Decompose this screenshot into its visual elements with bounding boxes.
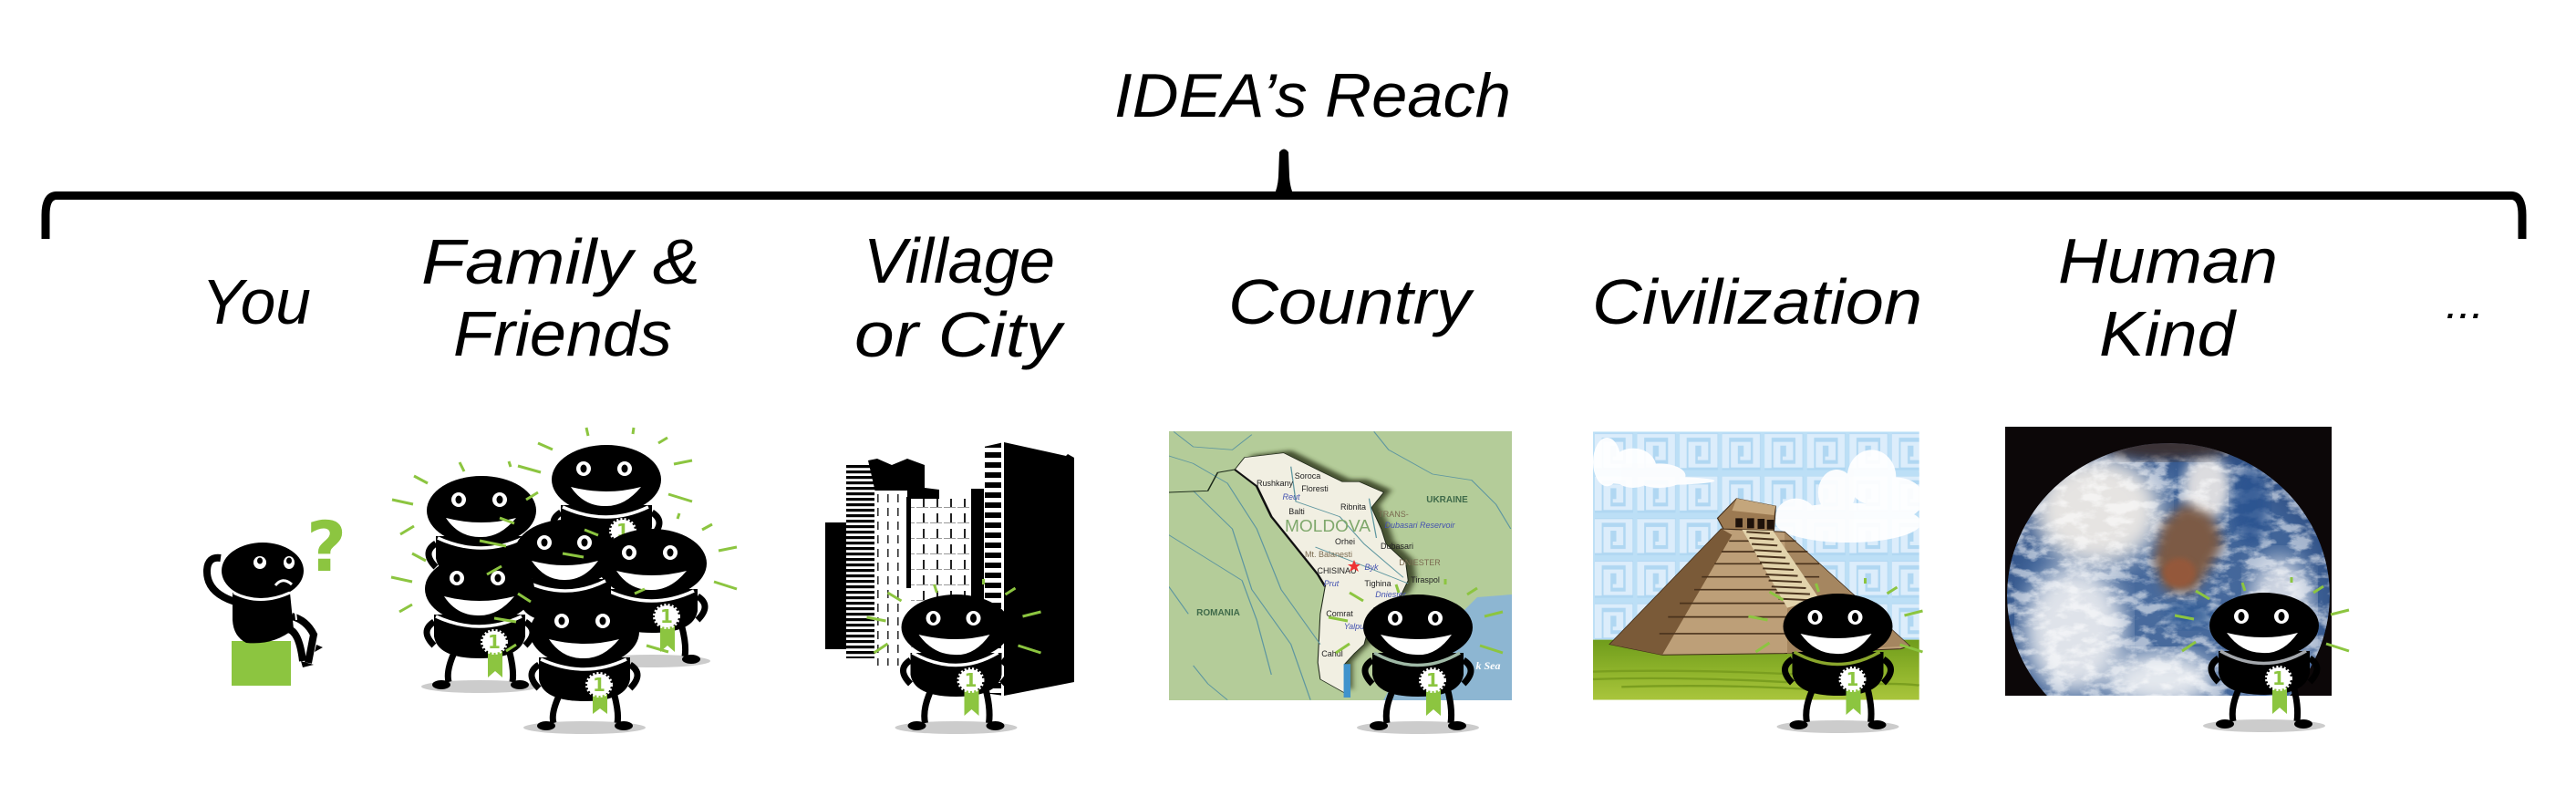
label: Village or City: or City <box>854 299 1065 370</box>
group: family and friends characters <box>391 428 737 734</box>
image: map of Moldova: DNIESTER <box>1399 558 1441 567</box>
image: map of Moldova <box>1169 431 1512 700</box>
image: Earth from space <box>2005 427 2332 696</box>
ocean areas <box>2232 468 2269 544</box>
image: map of Moldova: Soroca <box>1295 471 1320 481</box>
image: map of Moldova: MOLDOVA <box>1285 517 1371 535</box>
pyramid <box>1610 529 1909 655</box>
label: Civilization: Civilization <box>1592 266 1922 337</box>
cloud texture <box>2007 443 2330 696</box>
image: map of Moldova: Orhei <box>1335 537 1355 546</box>
label: Human Kind: Human <box>2058 225 2278 296</box>
image: map of Moldova: ROMANIA <box>1196 608 1240 618</box>
character: village or city: 1 <box>965 669 977 691</box>
image: map of Moldova: Dubasari <box>1381 542 1413 551</box>
label: Family & Friends: Family & <box>421 226 700 297</box>
image: map of Moldova: CHISINAU <box>1317 566 1357 575</box>
label: Human Kind: Kind <box>2099 298 2237 369</box>
soft white cloud masses <box>2033 456 2161 565</box>
dim polar edge <box>2103 443 2232 462</box>
image: map of Moldova: Dniester <box>1375 590 1407 599</box>
sea <box>1383 594 1512 700</box>
icon: green question mark: ? <box>306 506 347 587</box>
image: map of Moldova: UKRAINE <box>1426 495 1468 505</box>
group: family and friends characters: 1 <box>616 520 629 542</box>
image: map of Moldova: Yalpu <box>1344 622 1364 631</box>
label: Human Kind <box>2058 225 2278 369</box>
image: map of Moldova: Reut <box>1282 492 1300 501</box>
label: Country: Country <box>1228 266 1474 337</box>
image: map of Moldova: Mt. Balanesti <box>1305 550 1352 559</box>
image: map of Moldova: Cahul <box>1321 649 1343 658</box>
image: map of Moldova: Dubasari Reservoir <box>1384 521 1456 530</box>
group: family and friends characters: 1 <box>593 674 605 696</box>
character: human kind <box>2175 577 2349 732</box>
image: map of Moldova: Prut <box>1324 579 1340 588</box>
label: Village or City: Village <box>864 225 1055 296</box>
character: human kind: 1 <box>2272 667 2285 689</box>
image: city skyline <box>825 442 1074 696</box>
image: map of Moldova: Floresti <box>1301 484 1329 493</box>
label: You: You <box>202 266 311 337</box>
group: family and friends characters: 1 <box>488 631 501 653</box>
character: village or city <box>866 579 1041 734</box>
title: IDEA’s Reach <box>1114 61 1511 130</box>
character: civilization: 1 <box>1847 668 1858 690</box>
image: map of Moldova: Rushkany <box>1257 479 1294 488</box>
label: Village or City <box>854 225 1065 370</box>
image: map of Moldova: Ribnita <box>1340 502 1366 512</box>
image: map of Moldova: Byk <box>1364 563 1379 572</box>
label: Family & Friends: Friends <box>453 298 672 369</box>
group: family and friends characters: 1 <box>660 605 673 627</box>
image: map of Moldova: Balti <box>1288 507 1305 516</box>
image: map of Moldova: k Sea <box>1475 659 1501 672</box>
character: country <box>1329 579 1503 734</box>
image: map of Moldova: TRANS- <box>1378 510 1409 519</box>
image: map of Moldova: Tighina <box>1364 579 1391 588</box>
character: civilization <box>1749 578 1922 733</box>
bracket <box>46 150 2522 239</box>
label: ellipsis: ... <box>2446 280 2484 327</box>
continent <box>2154 503 2223 593</box>
clouds <box>1593 438 1924 543</box>
grass <box>1593 640 1919 700</box>
icon: puzzled character on green box <box>207 543 323 686</box>
character: country: 1 <box>1426 669 1439 691</box>
image: map of Moldova: Comrat <box>1326 609 1353 618</box>
image: map of Moldova: Tiraspol <box>1411 575 1440 584</box>
image: stepped pyramid <box>1593 431 1924 700</box>
label: Family & Friends <box>421 226 700 369</box>
